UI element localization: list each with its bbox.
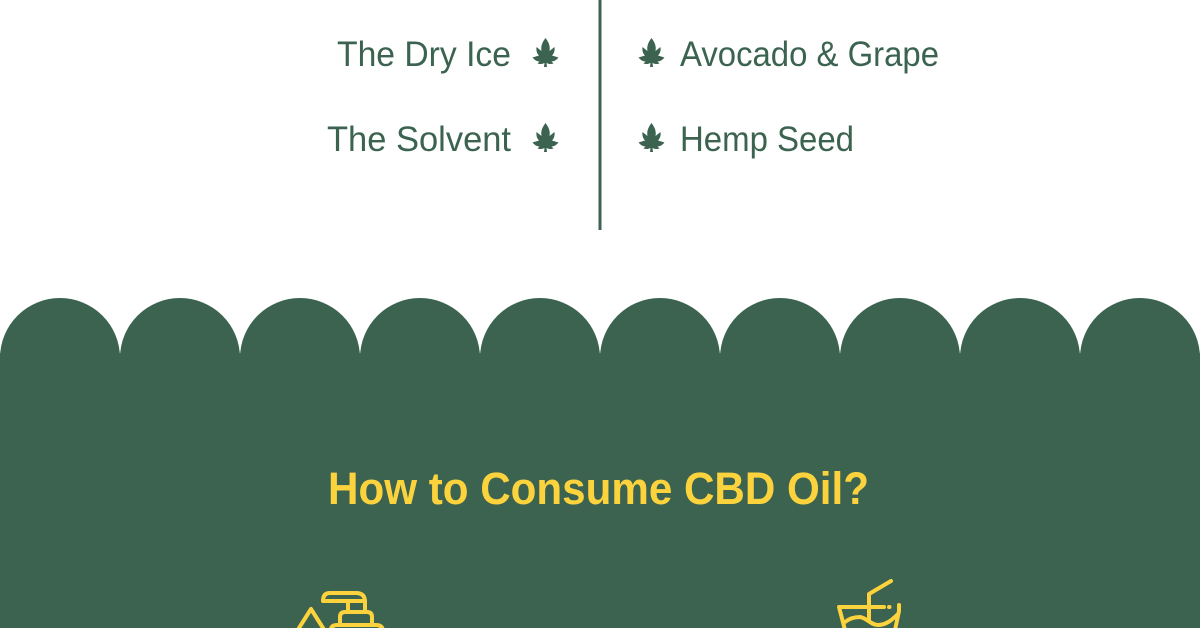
icon: leaf beside The Solvent: [532, 123, 558, 152]
text: Avocado & Grape: Avocado & Grape: [680, 35, 939, 74]
vertical divider: [598, 0, 602, 230]
heading: How to Consume CBD Oil?: How to Consume CBD Oil?: [328, 463, 869, 514]
text: Hemp Seed: Hemp Seed: [680, 120, 854, 159]
extraction methods list: [327, 35, 558, 159]
icon: leaf beside Hemp Seed: [638, 123, 664, 152]
carrier oils list: [638, 35, 939, 159]
icon: leaf beside The Dry Ice: [532, 38, 558, 67]
icon: drink with straw: [839, 581, 899, 628]
text: The Dry Ice: The Dry Ice: [337, 35, 511, 74]
icon: oil drop and pump bottle: [299, 593, 383, 628]
text: The Solvent: The Solvent: [327, 120, 511, 159]
icon: leaf beside Avocado and Grape: [638, 38, 664, 67]
panel: scalloped green section: [0, 298, 1200, 628]
